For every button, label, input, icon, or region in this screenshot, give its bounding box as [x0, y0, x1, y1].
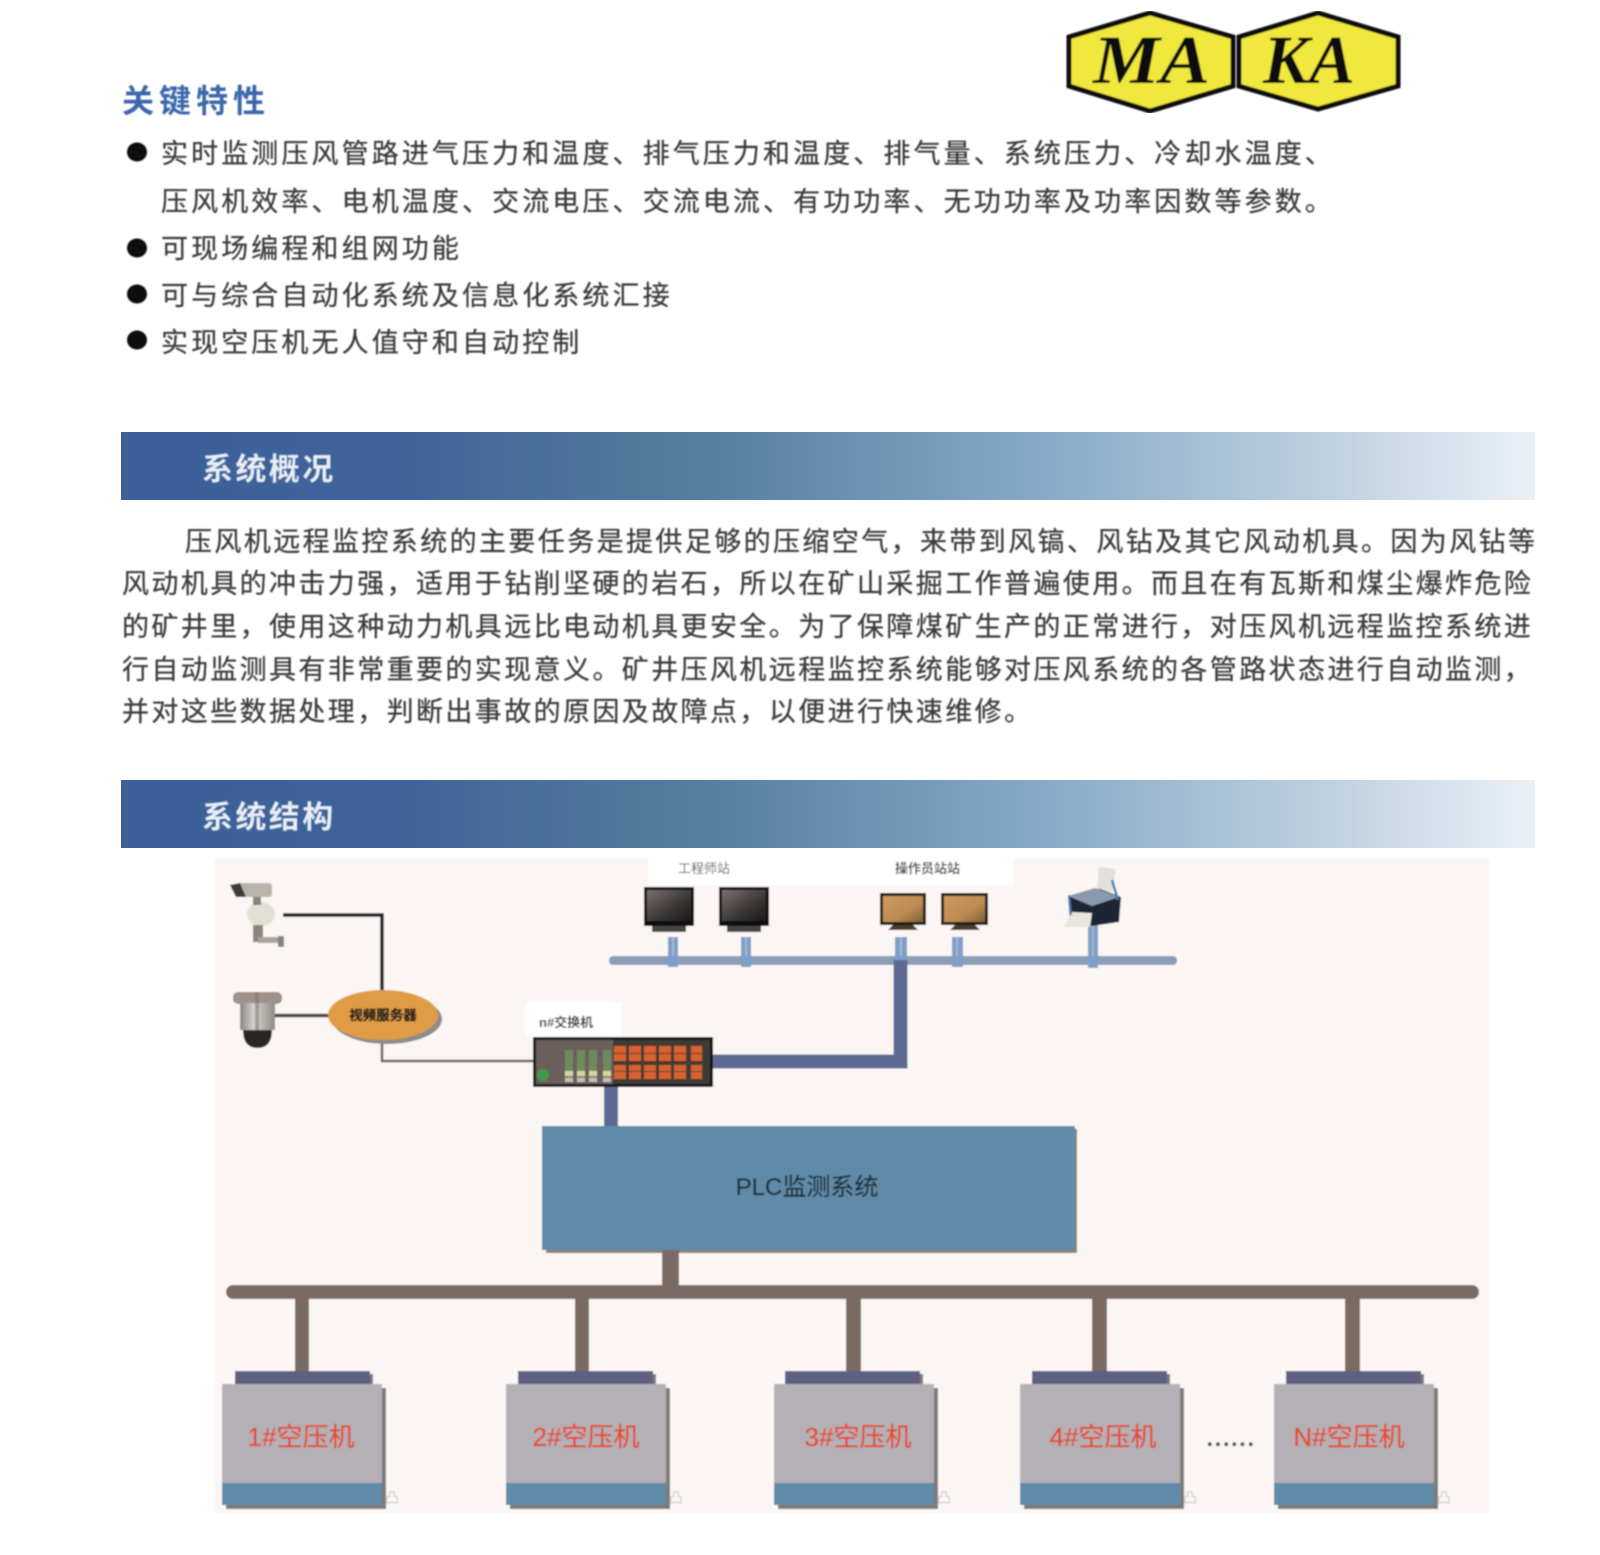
section bar: 系统结构: 系统结构: [202, 800, 336, 835]
PLC monitoring box: PLC监测系统: [736, 1174, 878, 1201]
LAN bus: [609, 956, 1177, 965]
compressor 3: [774, 1371, 951, 1509]
icon: engineer monitor 1: [644, 887, 694, 932]
compressor 1: [222, 1371, 399, 1509]
bullet 1: [127, 142, 147, 162]
overview paragraph: 压风机远程监控系统的主要任务是提供足够的压缩空气，来带到风镐、风钻及其它风动机具。因为风钻等: [185, 527, 1537, 557]
logo: MA KA: [1069, 13, 1398, 111]
logo: MA KA: KA: [1262, 22, 1355, 98]
icon: printer: [1064, 867, 1121, 927]
camera wiring: [275, 915, 535, 1061]
overview paragraph: 的矿井里，使用这种动力机具远比电动机具更安全。为了保障煤矿生产的正常进行，对压风机远程监控系统进: [122, 612, 1533, 642]
ellipsis between compressors: ......: [1206, 1425, 1256, 1452]
compressor 4: 凸: [1183, 1490, 1197, 1506]
drop lines: [668, 925, 1098, 968]
overview paragraph: 并对这些数据处理，判断出事故的原因及故障点，以便进行快速维修。: [122, 697, 1033, 727]
bullet 2: [127, 238, 147, 258]
icon: operator monitor 1: [880, 893, 926, 930]
feature 1 continued: 压风机效率、电机温度、交流电压、交流电流、有功功率、无功功率及功率因数等参数。: [161, 187, 1335, 217]
feature 4: 实现空压机无人值守和自动控制: [161, 328, 582, 358]
compressor 4: 4#空压机: [1050, 1422, 1156, 1452]
icon: network switch: [533, 1037, 713, 1087]
compressor N: 凸: [1437, 1490, 1451, 1506]
bullet 3: [127, 284, 147, 304]
bullet 4: [127, 330, 147, 350]
label: engineer station: 工程师站: [678, 861, 730, 876]
overview paragraph: 行自动监测具有非常重要的实现意义。矿井压风机远程监控系统能够对压风系统的各管路状态进行自动监测，: [122, 655, 1533, 685]
panel: system structure diagram: [214, 858, 1490, 1513]
top workstation network: [609, 925, 1177, 968]
compressor 2: 凸: [669, 1490, 683, 1506]
label: operator station: 操作员站站: [895, 861, 960, 876]
fieldbus: [226, 1250, 1479, 1372]
thick pipe: switch to LAN: [713, 960, 900, 1062]
section bar: 系统结构: [121, 780, 1535, 848]
PLC monitoring box: [542, 1126, 1077, 1253]
compressor N: N#空压机: [1293, 1422, 1405, 1452]
icon: engineer monitor 2: [719, 887, 769, 932]
compressor 4: [1020, 1371, 1197, 1509]
compressor 1: 1#空压机: [248, 1422, 354, 1452]
video server ellipse: [328, 990, 442, 1044]
key features list: [127, 139, 1335, 358]
logo: MA KA: MA: [1092, 22, 1210, 98]
icon: bullet camera: [230, 883, 284, 947]
compressor N: [1274, 1371, 1451, 1509]
feature 1: 实时监测压风管路进气压力和温度、排气压力和温度、排气量、系统压力、冷却水温度、: [161, 139, 1335, 169]
compressor 2: 2#空压机: [533, 1422, 639, 1452]
compressor 2: [506, 1371, 683, 1509]
section bar: 系统概况: [121, 432, 1535, 500]
compressor 1: 凸: [385, 1490, 399, 1506]
feature 2: 可现场编程和组网功能: [161, 234, 462, 264]
label: switch: n#交换机: [539, 1015, 593, 1030]
feature 3: 可与综合自动化系统及信息化系统汇接: [161, 281, 673, 311]
icon: operator monitor 2: [941, 893, 988, 930]
label: switch: [525, 1002, 621, 1037]
pipe: switch to PLC: [604, 1085, 618, 1128]
overview paragraph: [122, 527, 1537, 727]
overview paragraph: 风动机具的冲击力强，适用于钻削坚硬的岩石，所以在矿山采掘工作普遍使用。而且在有瓦斯和煤尘爆炸危险: [122, 569, 1533, 599]
section bar: 系统概况: 系统概况: [202, 452, 336, 487]
icon: dome camera: [233, 992, 282, 1048]
video server ellipse: 视频服务器: [349, 1007, 417, 1023]
heading: 关键特性: 关键特性: [122, 83, 270, 119]
compressor 3: 3#空压机: [805, 1422, 911, 1452]
compressor 3: 凸: [937, 1490, 951, 1506]
